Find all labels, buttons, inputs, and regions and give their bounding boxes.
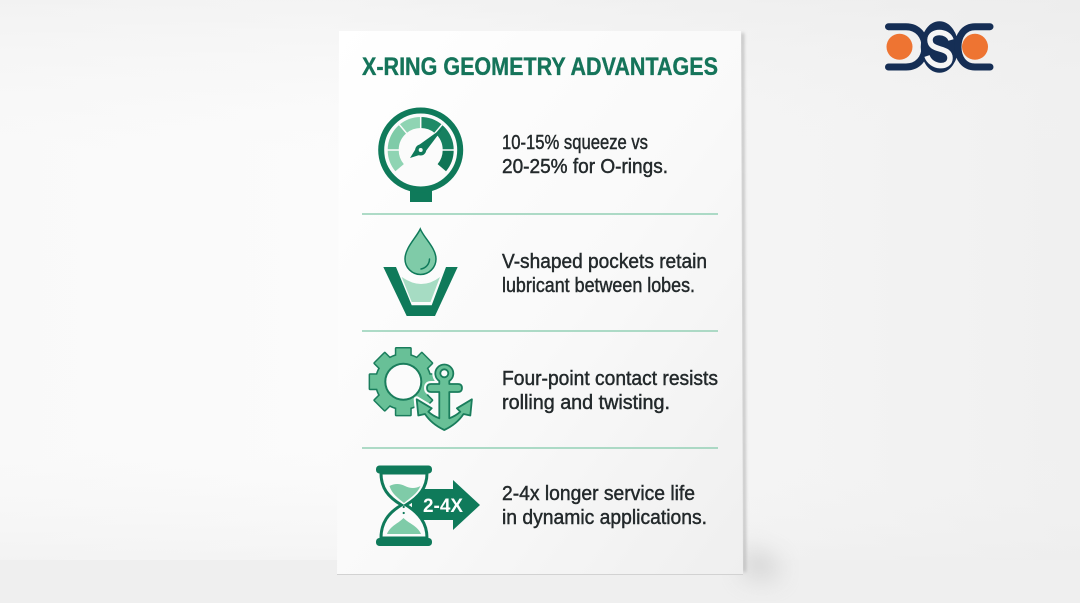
icon: hourglass with 2-4X arrow bbox=[376, 466, 480, 546]
text: service life: 2-4x longer service life bbox=[502, 483, 695, 505]
text: squeeze comparison: 10-15% squeeze vs bbox=[502, 132, 648, 154]
title: X-RING GEOMETRY ADVANTAGES bbox=[362, 53, 718, 81]
gear bbox=[370, 348, 436, 415]
icon: oil drop in V pocket bbox=[383, 229, 458, 316]
text: lubricant retention bbox=[502, 251, 707, 297]
text: four-point contact bbox=[502, 368, 718, 414]
text: squeeze comparison bbox=[502, 132, 668, 178]
logo: DSC bbox=[886, 23, 990, 71]
anchor bbox=[417, 365, 472, 430]
panel: advantages card bbox=[337, 31, 778, 580]
text: four-point contact: rolling and twisting. bbox=[502, 392, 670, 414]
text: four-point contact: Four-point contact resists bbox=[502, 368, 718, 390]
text: lubricant retention: V-shaped pockets retain bbox=[502, 251, 707, 273]
arrow label: 2-4X bbox=[423, 495, 463, 517]
text: lubricant retention: lubricant between lobes. bbox=[502, 275, 695, 297]
text: service life: in dynamic applications. bbox=[502, 507, 707, 529]
icon: gear and anchor bbox=[370, 348, 472, 430]
text: service life bbox=[502, 483, 707, 529]
text: squeeze comparison: 20-25% for O-rings. bbox=[502, 156, 668, 178]
icon: pressure gauge bbox=[381, 110, 460, 202]
